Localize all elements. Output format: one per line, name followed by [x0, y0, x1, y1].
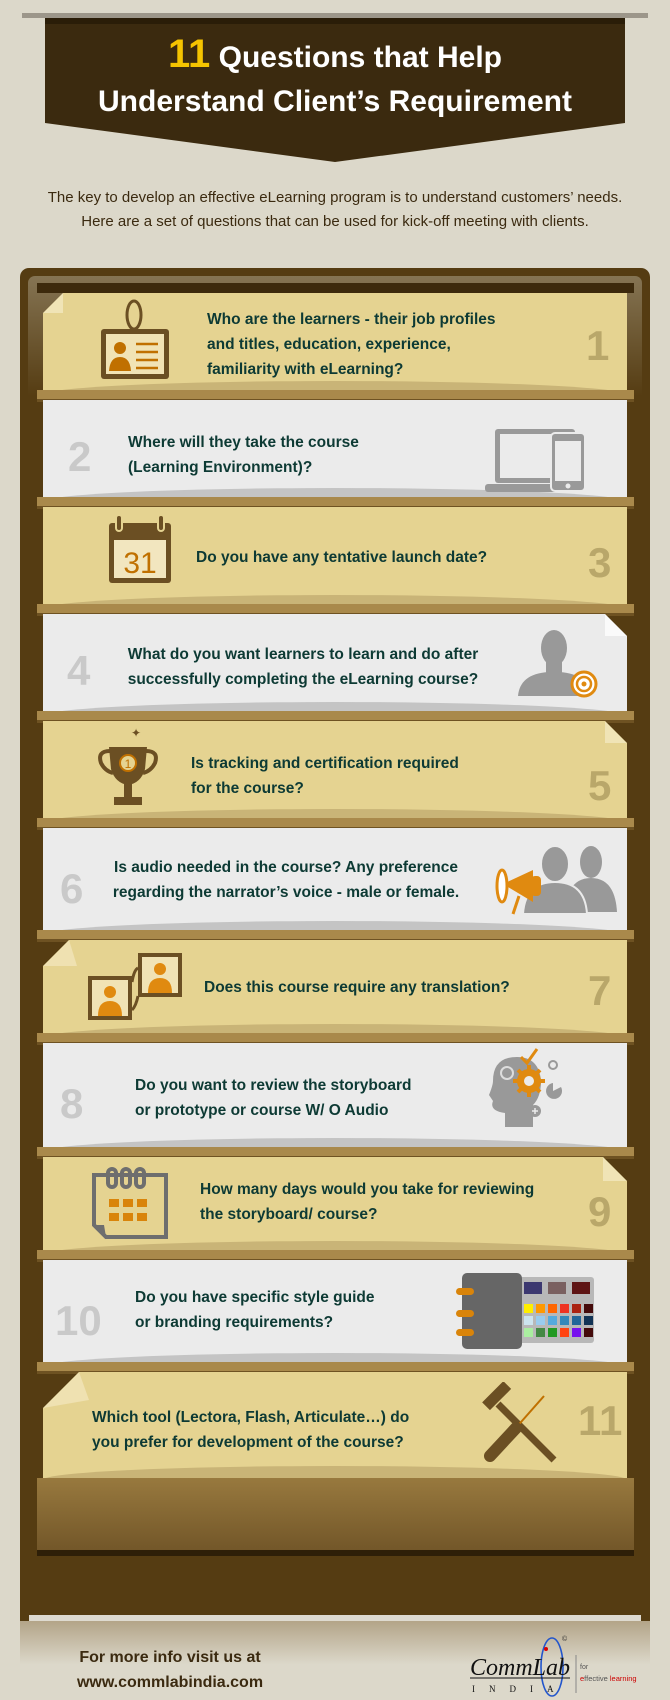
number 3: 3: [588, 539, 611, 586]
icon: photo frames: [88, 953, 182, 1020]
number 8: 8: [60, 1080, 83, 1127]
number 1: 1: [586, 322, 609, 369]
card 4: [37, 604, 634, 711]
question 5 text: Is tracking and certification required: [191, 755, 459, 772]
question 6 text: [113, 859, 459, 901]
question 8 text: [135, 1077, 411, 1119]
footer text: For more info visit us at: [79, 1649, 261, 1666]
question 1 text: Who are the learners - their job profiles: [207, 311, 496, 328]
number 5: 5: [588, 762, 611, 809]
title text: Understand Client’s Requirement: [98, 85, 572, 118]
icon: crossed tools: [482, 1382, 556, 1462]
question 4 text: successfully completing the eLearning course?: [128, 671, 478, 688]
question 11 text: Which tool (Lectora, Flash, Articulate…) do: [92, 1409, 409, 1426]
question 3 text: Do you have any tentative launch date?: [196, 549, 487, 566]
icon: calendar 31: 31: [123, 547, 157, 580]
intro text: The key to develop an effective eLearning program is to understand customers’ needs.: [48, 189, 622, 206]
white ledge: [29, 1615, 641, 1621]
question 9 text: the storyboard/ course?: [200, 1206, 377, 1223]
number 7: 7: [588, 967, 611, 1014]
card 1: [37, 283, 634, 390]
footer text: [77, 1649, 263, 1691]
question 5 text: for the course?: [191, 780, 304, 797]
icon: megaphone and people: [496, 846, 617, 914]
card 5: [37, 711, 634, 818]
footer: [20, 1621, 650, 1700]
card 11: [37, 1362, 634, 1478]
question 10 text: or branding requirements?: [135, 1314, 333, 1331]
icon: calendar 31: [109, 516, 171, 583]
card 9: [37, 1147, 634, 1250]
question 2 text: Where will they take the course: [128, 434, 359, 451]
logo: for: [580, 1664, 589, 1671]
top grey bar: [22, 13, 648, 18]
card 3: [37, 497, 634, 604]
question 10 text: [135, 1289, 374, 1331]
question 4 text: What do you want learners to learn and do after: [128, 646, 478, 663]
icon: laptop and phone: [485, 429, 584, 492]
question 5 text: [191, 756, 458, 793]
card 7: [37, 930, 634, 1033]
question 2 text: (Learning Environment)?: [128, 459, 312, 476]
number 10: 10: [55, 1297, 102, 1344]
question 11 text: [92, 1410, 409, 1450]
logo: CommLab: [470, 1655, 570, 1681]
question 9 text: [200, 1182, 534, 1222]
logo: [470, 1635, 637, 1697]
number 6: 6: [60, 865, 83, 912]
question 8 text: Do you want to review the storyboard: [135, 1077, 411, 1094]
footer text: www.commlabindia.com: [77, 1674, 263, 1691]
number 2: 2: [68, 433, 91, 480]
number 9: 9: [588, 1188, 611, 1235]
main box: [20, 268, 650, 1621]
question 4 text: [128, 648, 478, 688]
logo: effective learning: [580, 1674, 637, 1683]
question 7 text: Does this course require any translation?: [204, 979, 510, 996]
intro text: Here are a set of questions that can be used for kick-off meeting with clients.: [81, 213, 589, 230]
icon: colour palette notebook: [456, 1273, 594, 1349]
icon: trophy: ✦: [131, 726, 141, 740]
question 8 text: or prototype or course W/ O Audio: [135, 1102, 388, 1119]
logo: ©: [562, 1635, 568, 1643]
question 6 text: regarding the narrator’s voice - male or female.: [113, 884, 459, 901]
shelf: [37, 1478, 634, 1556]
icon: person with target: [518, 630, 598, 698]
number 4: 4: [67, 647, 90, 694]
icon: head with gears: [489, 1048, 562, 1127]
question 9 text: How many days would you take for reviewing: [200, 1181, 534, 1198]
logo: INDIA: [472, 1684, 568, 1694]
icon: trophy: 1: [125, 757, 132, 771]
question 1 text: and titles, education, experience,: [207, 336, 451, 353]
question 1 text: [207, 312, 495, 378]
question 1 text: familiarity with eLearning?: [207, 361, 403, 378]
intro text: [48, 189, 622, 230]
title text: 11 Questions that Help: [168, 32, 502, 76]
question 10 text: Do you have specific style guide: [135, 1289, 374, 1306]
title text: [98, 32, 572, 118]
card 6: [37, 818, 634, 930]
question 2 text: [128, 434, 359, 476]
number 11: 11: [578, 1397, 622, 1444]
card 8: [37, 1033, 634, 1147]
icon: trophy: [98, 728, 158, 805]
title banner: [45, 18, 625, 162]
icon: calendar grid: [92, 1167, 168, 1239]
icon: id badge: [101, 300, 169, 379]
card 2: [37, 390, 634, 497]
card 10: [37, 1250, 634, 1362]
question 6 text: Is audio needed in the course? Any preference: [114, 859, 458, 876]
question 11 text: you prefer for development of the course?: [92, 1434, 404, 1451]
